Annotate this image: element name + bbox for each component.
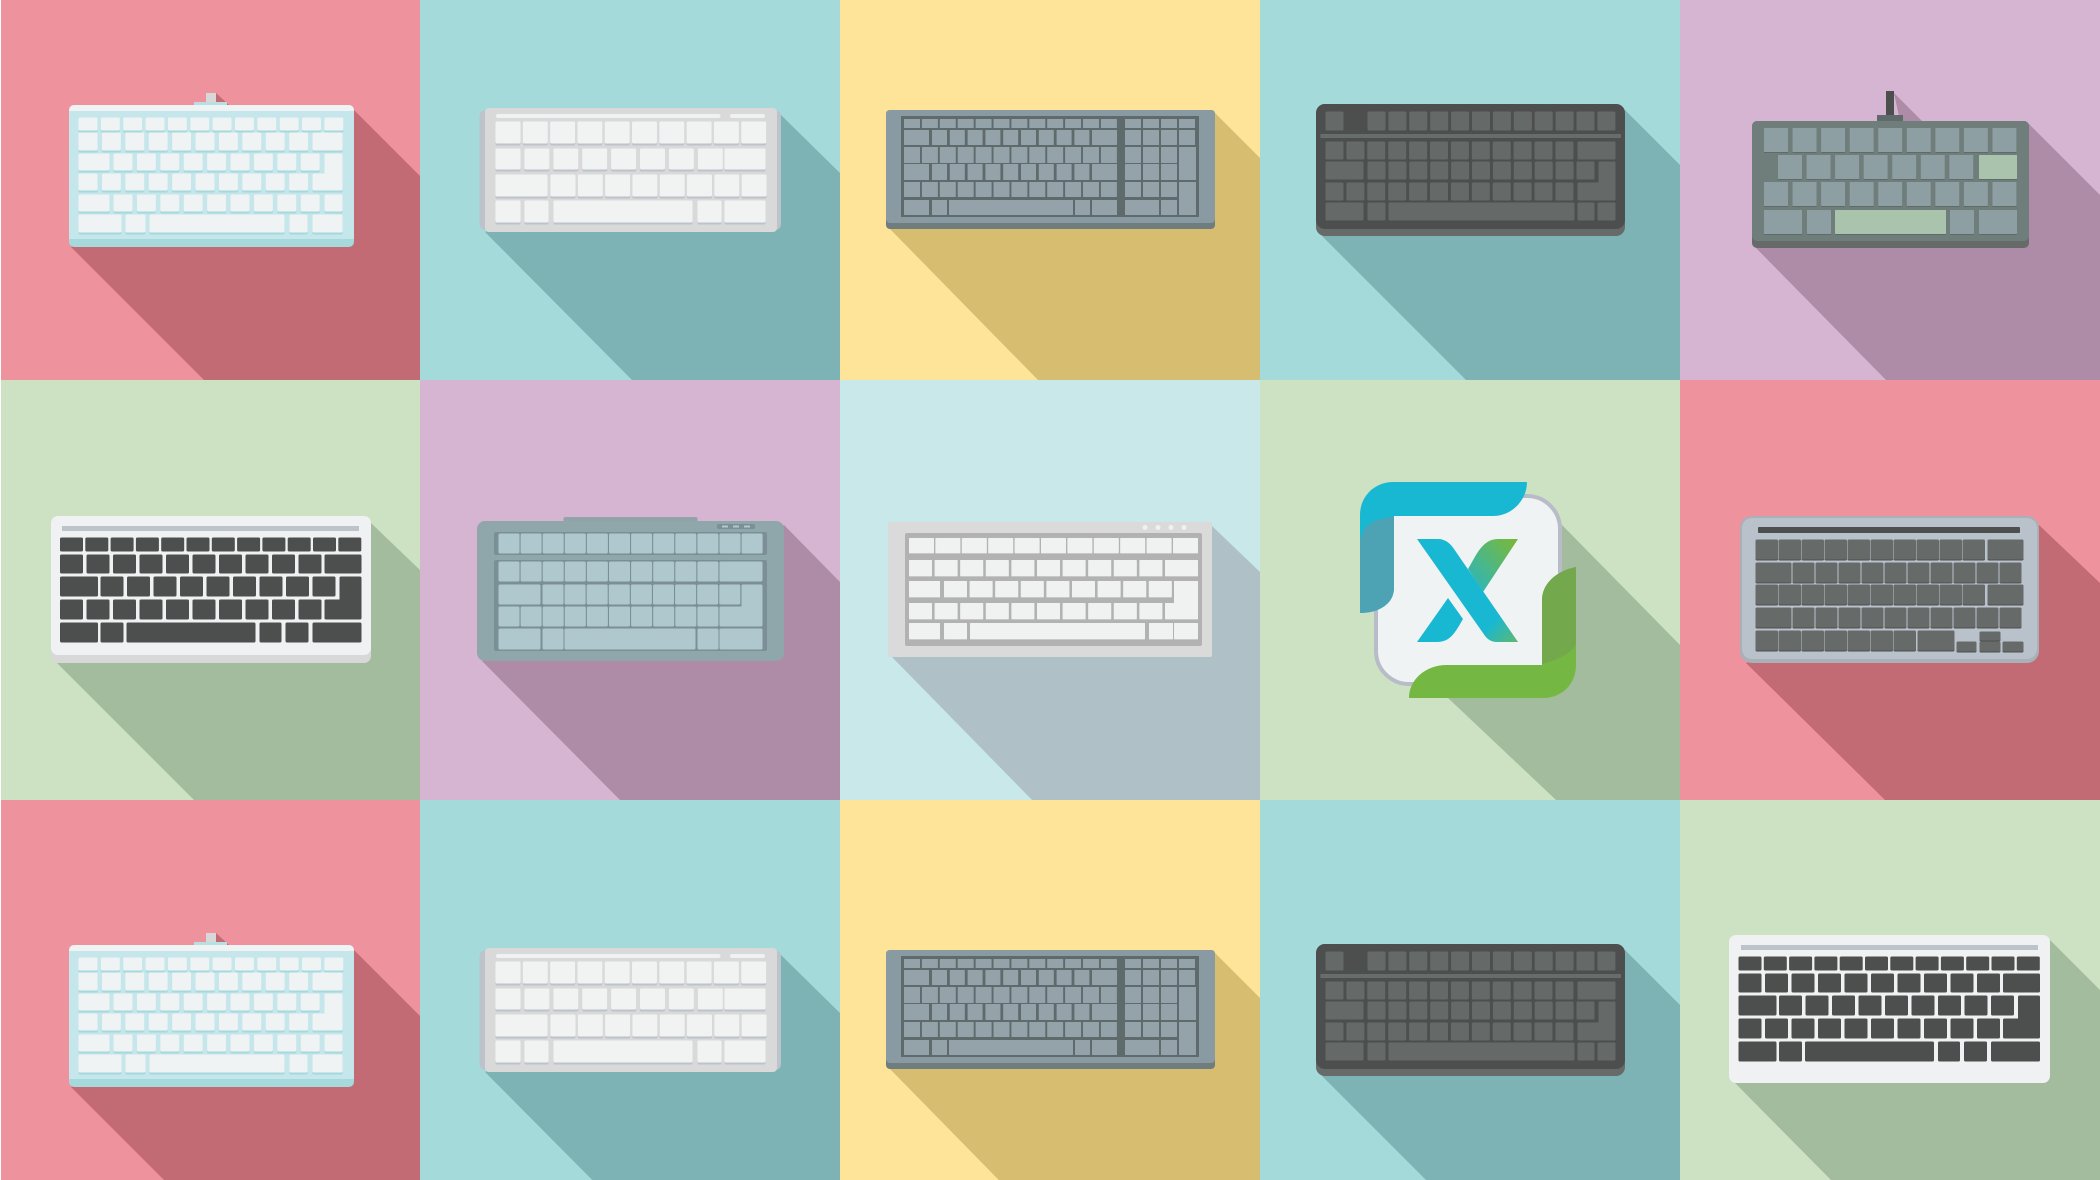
tile: pink white-blue compact keyboard bbox=[1, 0, 420, 380]
tile: yellow grey full-size keyboard, repeated bbox=[840, 800, 1260, 1180]
tile: teal white keyboard bbox=[420, 0, 840, 380]
tile: green white keyboard without base strip bbox=[1680, 800, 2100, 1180]
tile: purple teal-grey keyboard bbox=[420, 380, 840, 800]
tile: green logo bbox=[1260, 380, 1680, 800]
tile: pink white-blue compact keyboard, repeated bbox=[1, 800, 420, 1180]
tile: teal dark keyboard bbox=[1260, 0, 1680, 380]
tile: pink silver keyboard bbox=[1680, 380, 2100, 800]
tile: light blue white keyboard bbox=[840, 380, 1260, 800]
tile: teal dark keyboard, repeated bbox=[1260, 800, 1680, 1180]
logo bbox=[1360, 482, 1576, 698]
tile: green white keyboard with dark keys bbox=[1, 380, 420, 800]
tile: yellow grey full-size keyboard bbox=[840, 0, 1260, 380]
tile: purple grey keyboard with cable bbox=[1680, 0, 2100, 380]
tile: teal white keyboard, repeated bbox=[420, 800, 840, 1180]
